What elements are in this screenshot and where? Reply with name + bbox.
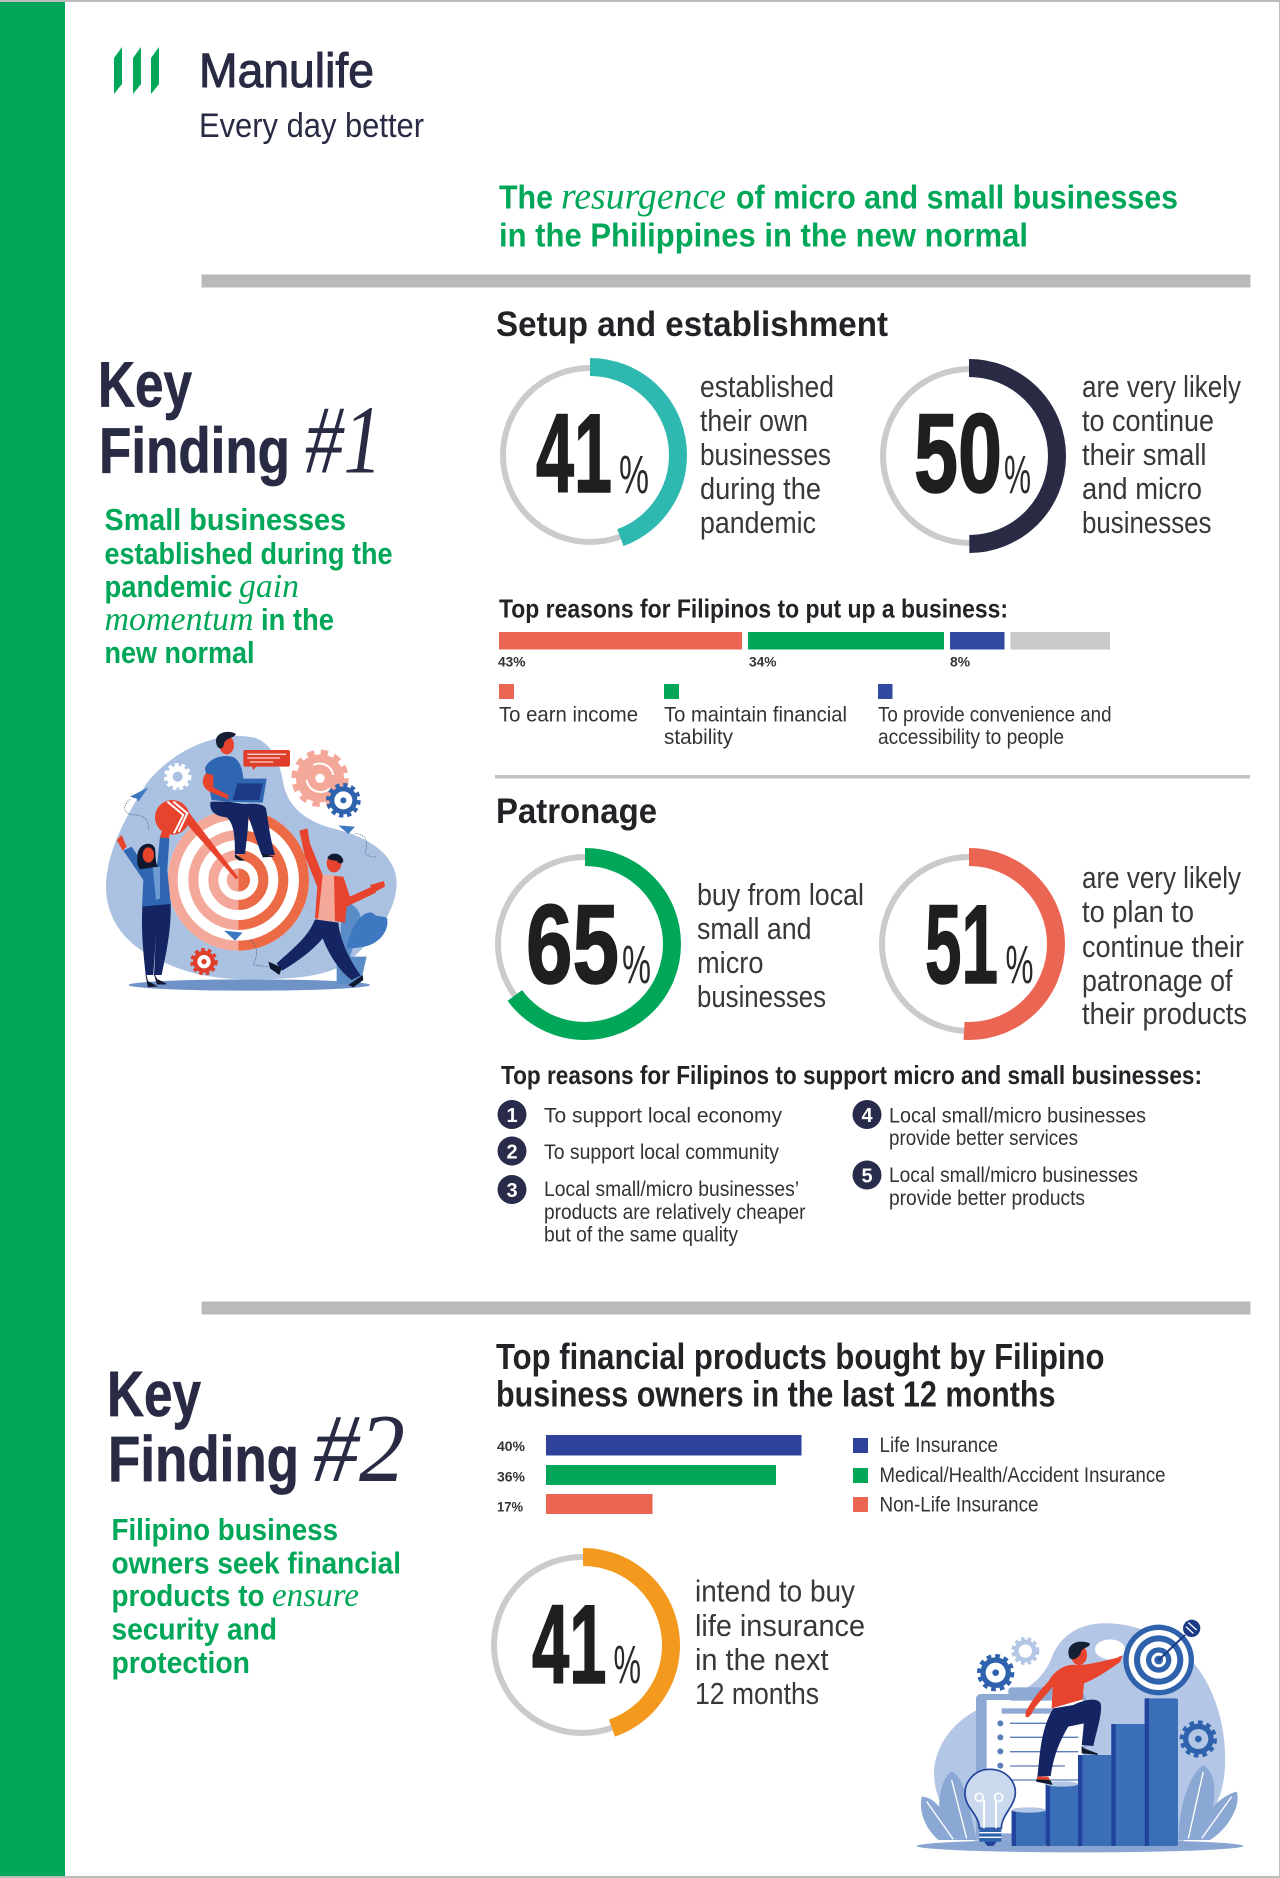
legend: Life Insurance [880, 1434, 998, 1457]
text block: Key Finding 2 summary: Filipino business [112, 1512, 338, 1547]
list: top reasons to support micro and small businesses: Local small/micro businesses [889, 1164, 1138, 1187]
ground shadow [129, 979, 370, 991]
heading: top financial products: Top financial products bought by Filipino [496, 1336, 1104, 1377]
donut: 65 percent [498, 857, 672, 1031]
dart [155, 800, 238, 879]
heading: Key Finding #1: Key [98, 348, 192, 420]
title: resurgence [561, 176, 726, 218]
donut: 41 percent: % [619, 445, 649, 505]
chart: top reasons to put up a business [498, 594, 1112, 749]
text: plan to continue patronage: are very likely [1082, 860, 1241, 895]
donut: 41 percent intend to buy [494, 1557, 671, 1733]
illustration: team around a target [106, 732, 397, 991]
text block: Key Finding 2 summary: protection [112, 1645, 250, 1680]
legend: Medical/Health/Accident Insurance [880, 1464, 1166, 1487]
donut: 65 percent: % [622, 935, 651, 995]
text: intend to buy life insurance: intend to buy [695, 1574, 855, 1608]
logo: Manulife [114, 45, 424, 145]
list: top reasons to support micro and small businesses: 2 [506, 1142, 518, 1164]
list: top reasons to support micro and small businesses: provide better products [889, 1187, 1085, 1210]
donut: 50 percent: 50 [914, 391, 1002, 516]
heading: Key Finding #2: #2 [313, 1395, 405, 1503]
list: top reasons to support micro and small businesses: To support local economy [544, 1104, 782, 1128]
list: top reasons to support micro and small businesses: 3 [506, 1180, 518, 1202]
legend [853, 1434, 1166, 1516]
text block: Key Finding 2 summary: products to [112, 1578, 264, 1613]
text: plan to continue patronage [1082, 860, 1247, 1031]
donut: 50 percent: % [1004, 445, 1031, 505]
text block: Key Finding 1 summary [104, 502, 392, 670]
tagline: Every day better [199, 107, 424, 145]
text: plan to continue patronage: patronage of [1082, 963, 1233, 998]
heading: Key Finding #1 [98, 348, 382, 494]
text block: Key Finding 1 summary: gain [239, 568, 299, 605]
list: top reasons to support micro and small businesses: To support local community [544, 1141, 779, 1164]
heading: Key Finding #2 [107, 1358, 405, 1503]
heading: Setup and establishment: Setup and establishment [496, 305, 888, 344]
person: woman holding dart [117, 829, 171, 987]
heading: Key Finding #1: Finding [99, 414, 290, 486]
ground shadow [917, 1840, 1243, 1852]
heading: top financial products [496, 1336, 1104, 1414]
text block: Key Finding 2 summary: security and [112, 1612, 277, 1646]
text block: Key Finding 1 summary: momentum [104, 601, 254, 638]
heading: top financial products: business owners in the last 12 months [496, 1374, 1056, 1414]
panel: top financial products [494, 1336, 1166, 1733]
bar chart: 36% [497, 1470, 525, 1484]
list: top reasons to support micro and small businesses: but of the same quality [544, 1224, 738, 1246]
title: in the Philippines in the new normal [499, 216, 1028, 254]
brand name: Manulife [199, 45, 374, 98]
text: intend to buy life insurance: in the next [695, 1642, 829, 1677]
person: man running [268, 828, 385, 987]
leaves [921, 1765, 1238, 1840]
heading: Key Finding #1: #1 [305, 386, 382, 494]
green side band [0, 2, 65, 1876]
panel: patronage [496, 792, 1247, 1246]
person: climbing man [1025, 1642, 1123, 1785]
chart: top reasons to put up a business: To earn income [499, 704, 638, 726]
text: intend to buy life insurance: life insurance [695, 1608, 865, 1643]
person: man with laptop [203, 732, 275, 861]
bar columns [1012, 1698, 1178, 1846]
text: intend to buy life insurance [695, 1574, 865, 1711]
text: very likely to continue [1082, 369, 1241, 540]
text block: Key Finding 1 summary: Small businesses [104, 502, 346, 537]
donut: 51 percent [882, 857, 1056, 1031]
text block: Key Finding 2 summary: ensure [272, 1577, 359, 1614]
bar chart [497, 1435, 802, 1514]
text: very likely to continue: businesses [1082, 505, 1212, 540]
text: established their own businesses: during the [700, 471, 821, 506]
chart: top reasons to put up a business: To maintain financial [664, 704, 847, 726]
title: The [499, 178, 553, 216]
text: buy from local small and micro businesses: small and [697, 911, 812, 946]
heading: Key Finding #2: Key [107, 1358, 201, 1430]
text: intend to buy life insurance: 12 months [695, 1676, 819, 1711]
chart: top reasons to put up a business: accessibility to people [878, 726, 1064, 749]
chart: top reasons to put up a business: To provide convenience and [878, 704, 1112, 726]
text block: Key Finding 1 summary: established during the [104, 536, 392, 571]
text block: Key Finding 2 summary: owners seek financial [112, 1546, 401, 1580]
text: very likely to continue: and micro [1082, 471, 1202, 506]
list: top reasons to support micro and small businesses: 5 [861, 1166, 873, 1188]
chart: top reasons to put up a business: Top reasons for Filipinos to put up a business: [499, 594, 1008, 624]
text: established their own businesses: established [700, 369, 834, 404]
chart: top reasons to put up a business: 43% [498, 654, 526, 670]
list: top reasons to support micro and small businesses: Local small/micro businesses’ [544, 1178, 799, 1201]
paper planes [125, 787, 377, 967]
icon: Manulife stripes [114, 47, 159, 94]
text: very likely to continue: their small [1082, 437, 1206, 472]
speech bubble [243, 750, 290, 770]
donut: 50 percent [881, 368, 1057, 544]
clipboard [976, 1687, 1086, 1841]
list: top reasons to support micro and small businesses: products are relatively cheaper [544, 1201, 806, 1224]
text: buy from local small and micro businesses: micro [697, 945, 764, 980]
text: established their own businesses [700, 369, 834, 540]
title: of micro and small businesses [736, 178, 1178, 216]
donut: 51 percent: % [1006, 935, 1034, 995]
text: established their own businesses: their own [700, 403, 808, 438]
bar chart: 17% [497, 1500, 523, 1514]
chart: top reasons to put up a business: stability [664, 726, 733, 749]
donut: 41 percent: 41 [536, 391, 612, 516]
donut: 41 percent intend to buy: 41 [532, 1582, 606, 1707]
donut: 41 percent [502, 367, 678, 543]
donut: 41 percent intend to buy: % [614, 1635, 641, 1695]
illustration: man climbing bars to a target [917, 1620, 1243, 1852]
text: buy from local small and micro businesses: businesses [697, 979, 826, 1014]
text: buy from local small and micro businesses: buy from local [697, 877, 864, 912]
panel: setup and establishment [496, 305, 1241, 749]
list: top reasons to support micro and small businesses: provide better services [889, 1127, 1078, 1150]
gears [166, 752, 359, 974]
list: top reasons to support micro and small businesses [498, 1060, 1202, 1246]
list: top reasons to support micro and small businesses: 4 [861, 1105, 873, 1127]
potted plant [337, 900, 387, 985]
light bulb [965, 1769, 1015, 1846]
donut: 65 percent: 65 [526, 882, 619, 1007]
chart: top reasons to put up a business: 34% [749, 654, 776, 670]
text: established their own businesses: pandemic [700, 505, 816, 540]
donut: 51 percent: 51 [925, 882, 998, 1007]
text block: Key Finding 1 summary: pandemic [104, 569, 232, 604]
heading: Key Finding #2: Finding [108, 1423, 299, 1495]
text: buy from local small and micro businesses [697, 877, 864, 1014]
text block: Key Finding 1 summary: new normal [104, 635, 254, 670]
target [1123, 1620, 1200, 1695]
list: top reasons to support micro and small businesses: Local small/micro businesses [889, 1104, 1146, 1128]
heading: Patronage: Patronage [496, 792, 657, 831]
target [168, 809, 309, 951]
list: top reasons to support micro and small businesses: 1 [506, 1105, 518, 1127]
chart: top reasons to put up a business: 8% [950, 654, 970, 670]
text: plan to continue patronage: their products [1082, 996, 1247, 1031]
text block: Key Finding 1 summary: in the [261, 602, 334, 637]
text: plan to continue patronage: continue their [1082, 929, 1244, 964]
text: very likely to continue: are very likely [1082, 369, 1241, 404]
text: established their own businesses: businesses [700, 437, 831, 472]
text: very likely to continue: to continue [1082, 403, 1214, 438]
text: plan to continue patronage: to plan to [1082, 894, 1194, 929]
gears [979, 1639, 1215, 1756]
title [499, 176, 1178, 254]
bar chart: 40% [497, 1439, 525, 1454]
legend: Non-Life Insurance [880, 1494, 1038, 1516]
text block: Key Finding 2 summary [112, 1512, 401, 1680]
